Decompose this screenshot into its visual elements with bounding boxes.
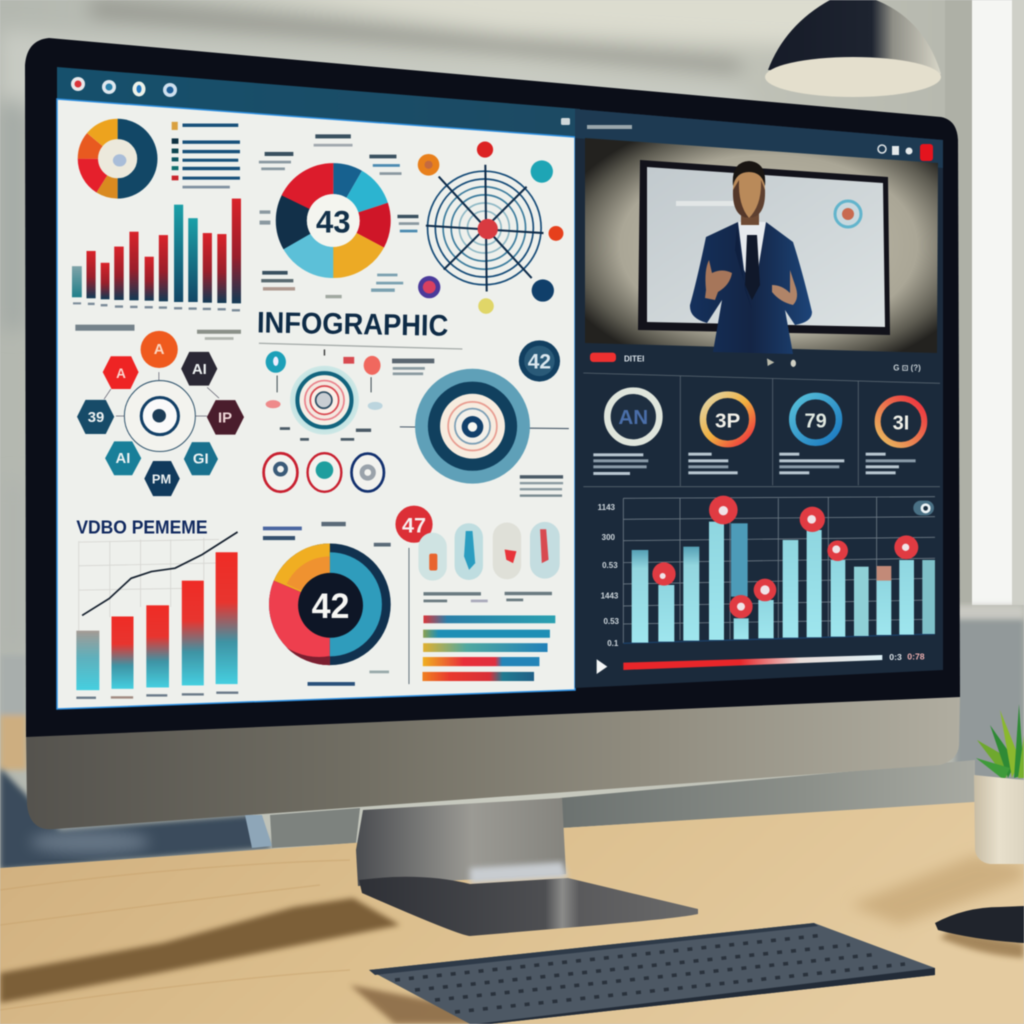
bar chart with red markers <box>598 496 935 648</box>
donut chart with 42 <box>263 522 391 686</box>
hub diagram with hexagon nodes: A <box>154 342 165 358</box>
four capsule icons <box>409 522 560 684</box>
video: presenter in front of a screen <box>585 138 938 354</box>
stat ring 2: 3P <box>715 409 741 432</box>
progress bar: 0:78 <box>907 651 925 661</box>
monitor bezel <box>25 38 960 737</box>
mouse <box>935 906 1024 958</box>
stat cards <box>583 373 940 487</box>
keyboard <box>369 923 935 1024</box>
pie callout captions <box>259 134 419 298</box>
line and bar chart <box>76 532 238 699</box>
radar chart <box>418 141 563 314</box>
axis labels <box>598 503 620 648</box>
play button <box>597 659 607 674</box>
stat ring 3 <box>792 396 839 443</box>
section heading: VDBO PEMEME <box>76 517 208 538</box>
hub diagram with hexagon nodes: PM <box>152 471 171 486</box>
axis labels: 0.53 <box>603 617 620 626</box>
monitor chin <box>26 692 960 829</box>
panel: white infographic sheet <box>57 99 575 709</box>
chair behind the desk <box>0 760 975 870</box>
lamp <box>765 0 941 97</box>
large target diagram: 42 <box>528 350 551 373</box>
pie chart with 43 <box>276 163 390 278</box>
stat ring 3: 79 <box>805 410 827 432</box>
panel: dark video player <box>575 109 943 688</box>
progress bar <box>623 651 925 670</box>
hub diagram with hexagon nodes: AI <box>192 362 207 378</box>
browser icons <box>71 77 177 97</box>
stat ring 1 <box>607 391 659 443</box>
axis labels: 0.1 <box>607 639 619 648</box>
presenter <box>690 161 812 354</box>
screen top bar <box>57 67 580 138</box>
stat captions <box>593 453 916 475</box>
stat ring 4 <box>878 398 924 445</box>
bar chart: top left <box>72 199 241 311</box>
axis labels: 300 <box>602 533 616 542</box>
hub diagram with hexagon nodes: AI <box>116 451 130 467</box>
donut chart with 42: 42 <box>312 586 349 626</box>
hub diagram with hexagon nodes <box>77 331 244 496</box>
upper infographic content <box>72 117 563 349</box>
sub-heading blurred captions <box>75 325 241 340</box>
stat ring 1: AN <box>618 406 648 429</box>
player control strip: DITEI <box>624 355 644 364</box>
hub diagram with hexagon nodes: 39 <box>88 410 104 426</box>
stat ring 4: 3I <box>893 412 909 434</box>
projection screen <box>638 160 890 335</box>
axis labels: 0.53 <box>602 561 618 570</box>
red markers <box>652 496 918 618</box>
player detail content <box>583 353 940 674</box>
axis labels: 1443 <box>601 591 619 600</box>
red badge 47 <box>395 506 433 543</box>
hub diagram with hexagon nodes: GI <box>193 452 209 468</box>
lower infographic content <box>76 331 569 699</box>
progress bar: 0:3 <box>889 652 902 662</box>
main heading: INFOGRAPHIC <box>257 306 449 343</box>
player control strip <box>590 353 921 373</box>
stat ring 2 <box>703 395 752 444</box>
donut chart: top left <box>76 117 160 201</box>
plant in a pot <box>974 704 1024 864</box>
hub diagram with hexagon nodes: IP <box>218 410 232 426</box>
pie chart with 43: 43 <box>316 204 351 239</box>
view toggle <box>913 501 934 515</box>
monitor stand <box>356 798 698 936</box>
three small ring icons <box>264 453 384 492</box>
concentric rings diagram <box>266 349 434 441</box>
legend list: top left <box>172 122 240 188</box>
desk <box>0 798 1024 1024</box>
horizontal bar chart <box>422 592 555 681</box>
red badge 47: 47 <box>402 513 426 538</box>
axis labels: 1143 <box>598 503 616 512</box>
hub diagram with hexagon nodes: A <box>116 366 126 381</box>
large target diagram <box>400 340 569 497</box>
player control strip: G ⊡ (?) <box>893 364 921 373</box>
